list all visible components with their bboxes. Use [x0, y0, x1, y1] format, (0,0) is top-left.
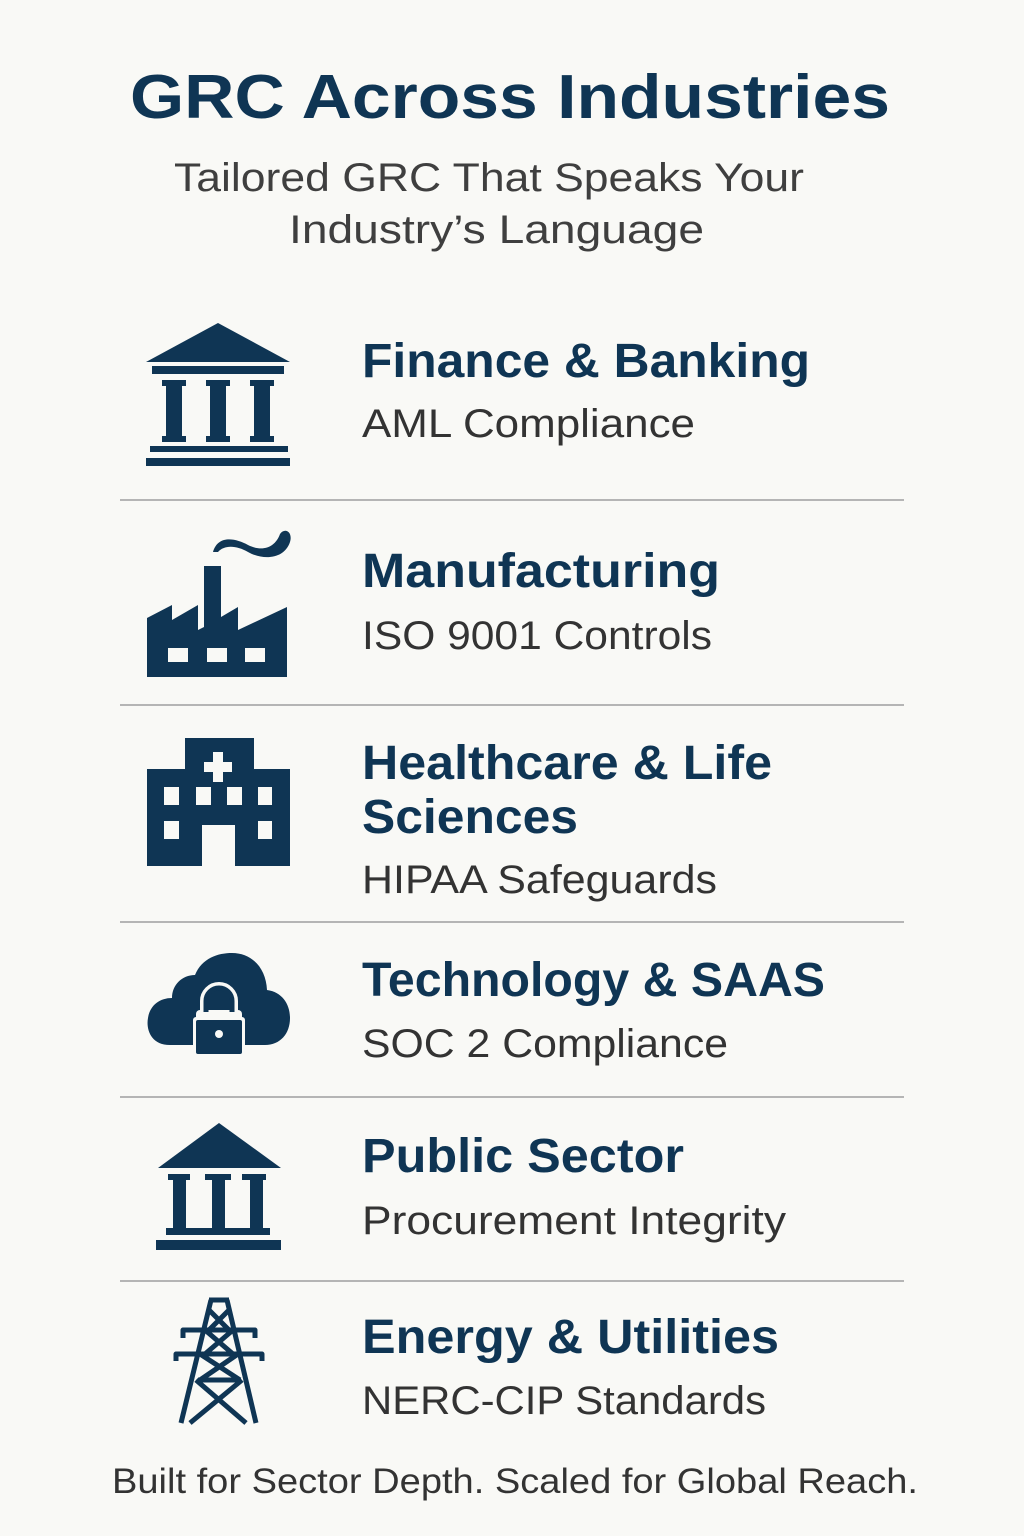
- text: energy: Energy & Utilities: [362, 1311, 779, 1364]
- icon: government building: [156, 1123, 281, 1250]
- text: finance: AML Compliance: [362, 402, 695, 446]
- text: energy: [362, 1311, 779, 1423]
- text: manufacturing: Manufacturing: [362, 545, 720, 598]
- text: public sector: [362, 1130, 786, 1243]
- text: healthcare: Healthcare & Life: [362, 737, 772, 790]
- icon: factory: [147, 531, 291, 677]
- text: finance: Finance & Banking: [362, 335, 810, 388]
- footer: Built for Sector Depth. Scaled for Global Reach.: [112, 1462, 918, 1501]
- text: energy: NERC-CIP Standards: [362, 1379, 766, 1423]
- text: healthcare: Sciences: [362, 791, 578, 844]
- title: GRC Across Industries: [130, 63, 890, 132]
- text: technology: SOC 2 Compliance: [362, 1022, 728, 1066]
- text: manufacturing: [362, 545, 720, 658]
- subtitle: [174, 156, 804, 252]
- icon: bank: [146, 323, 290, 466]
- subtitle: Industry’s Language: [289, 208, 704, 252]
- icon: hospital: [147, 738, 290, 866]
- text: technology: [362, 954, 825, 1066]
- text: public sector: Procurement Integrity: [362, 1199, 786, 1243]
- text: healthcare: HIPAA Safeguards: [362, 858, 717, 902]
- text: technology: Technology & SAAS: [362, 954, 825, 1007]
- subtitle: Tailored GRC That Speaks Your: [174, 156, 804, 200]
- text: public sector: Public Sector: [362, 1130, 684, 1183]
- text: healthcare: [362, 737, 772, 902]
- icon: cloud lock: [148, 953, 290, 1057]
- text: finance: [362, 335, 810, 446]
- text: manufacturing: ISO 9001 Controls: [362, 614, 712, 658]
- icon: power pylon: [176, 1300, 262, 1423]
